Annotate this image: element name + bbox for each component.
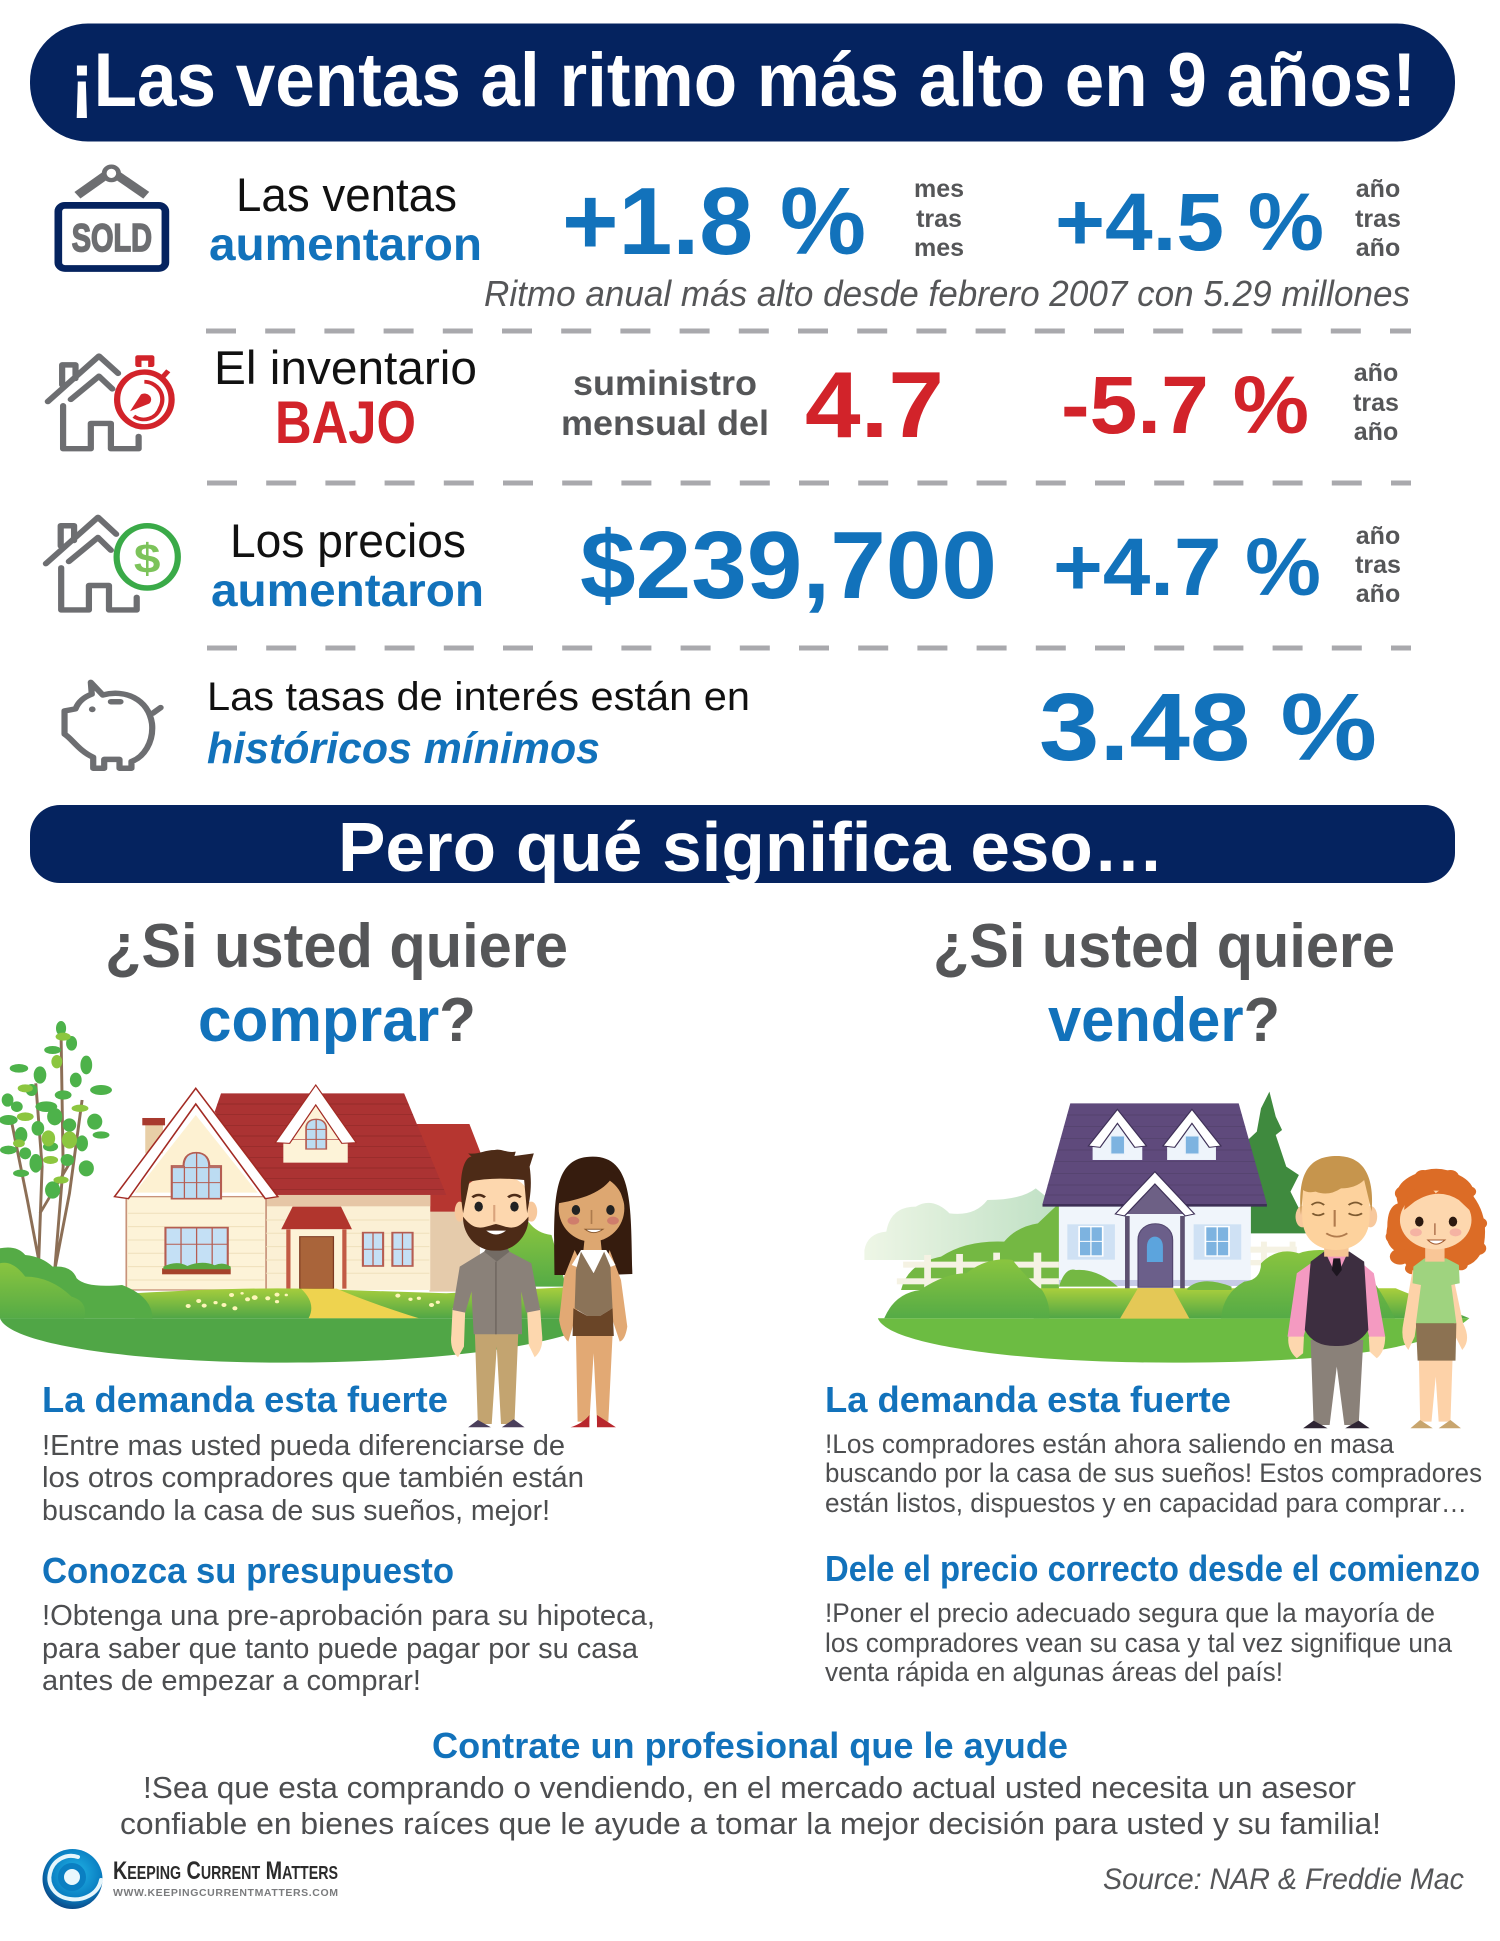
heading: strong demand: La demanda esta fuerte bbox=[825, 1379, 1231, 1420]
illustration: purple roof house and couple bbox=[864, 1092, 1487, 1428]
icon: house with dollar: $ bbox=[134, 535, 161, 582]
ground bbox=[0, 1318, 566, 1363]
heading: buyers: comprar? bbox=[198, 986, 476, 1055]
stat: months of supply: 4.7 bbox=[805, 352, 944, 457]
text: las ventas: Las ventas bbox=[236, 168, 457, 221]
text: advisor: !Sea que esta comprando o vendiendo, en el mercado actual usted necesita un asesor bbox=[143, 1770, 1356, 1805]
text: buyer demand: buscando la casa de sus sueños, mejor! bbox=[42, 1495, 550, 1527]
label: year over year: año bbox=[1356, 522, 1400, 550]
panel: prices row bbox=[46, 512, 1401, 619]
icon: house with stopwatch bbox=[48, 355, 172, 449]
title banner bbox=[30, 24, 1455, 142]
text: monthly supply: mensual del bbox=[561, 404, 769, 443]
stat: yearly inventory change: -5.7 % bbox=[1061, 360, 1309, 451]
ground bbox=[878, 1318, 1469, 1363]
text: historic lows: históricos mínimos bbox=[207, 724, 600, 773]
label: year over year: año bbox=[1354, 418, 1398, 446]
heading: buyers bbox=[105, 912, 568, 1055]
stat: interest rate: 3.48 % bbox=[1039, 674, 1377, 781]
text: buyer demand: los otros compradores que también están bbox=[42, 1462, 584, 1494]
logo: keeping current matters: Keeping Current Matters bbox=[113, 1857, 338, 1885]
heading: buyers: ¿Si usted quiere bbox=[105, 912, 568, 981]
text: price: venta rápida en algunas áreas del país! bbox=[825, 1657, 1283, 1687]
stat: monthly sales change: +1.8 % bbox=[562, 168, 866, 275]
text: budget: !Obtenga una pre-aprobación para su hipoteca, bbox=[42, 1600, 655, 1632]
text: buyer demand: !Entre mas usted pueda diferenciarse de bbox=[42, 1430, 565, 1462]
text: los precios: Los precios bbox=[230, 514, 466, 567]
icon: sold sign bbox=[58, 167, 165, 269]
bushes bbox=[884, 1250, 1395, 1318]
source note: Source: NAR & Freddie Mac bbox=[1103, 1863, 1464, 1896]
icon: piggy bank bbox=[65, 682, 161, 768]
panel: hire a professional bbox=[120, 1725, 1381, 1841]
text: price: los compradores vean su casa y tal vez signifique una bbox=[825, 1628, 1453, 1658]
man with beard bbox=[451, 1150, 542, 1427]
text: seller demand: buscando por la casa de sus sueños! Estos compradores bbox=[825, 1458, 1482, 1488]
icon: house with dollar bbox=[46, 517, 178, 610]
logo: keeping current matters: WWW.KEEPINGCURRENTMATTERS.COM bbox=[113, 1887, 338, 1899]
text: aumentaron: aumentaron bbox=[209, 218, 482, 270]
text: price: !Poner el precio adecuado segura que la mayoría de bbox=[825, 1598, 1435, 1628]
text: seller demand: !Los compradores están ahora saliendo en masa bbox=[825, 1429, 1395, 1459]
text: bajo: BAJO bbox=[275, 389, 416, 456]
panel: seller advice bbox=[825, 1379, 1482, 1687]
text: rates are at: Las tasas de interés están en bbox=[207, 675, 750, 719]
house bbox=[115, 1085, 481, 1292]
label: month over month: mes bbox=[914, 175, 964, 203]
logo: keeping current matters bbox=[42, 1849, 338, 1909]
flowers bbox=[186, 1292, 440, 1310]
heading: sellers: ¿Si usted quiere bbox=[933, 912, 1395, 981]
stat: yearly price change: +4.7 % bbox=[1053, 522, 1321, 613]
man with vest bbox=[1288, 1156, 1385, 1428]
label: year over year: año bbox=[1354, 359, 1398, 387]
panel: sales row bbox=[58, 167, 1410, 314]
heading: hire: Contrate un profesional que le ayude bbox=[432, 1725, 1068, 1766]
text: aumentaron: aumentaron bbox=[211, 564, 484, 616]
text: seller demand: están listos, dispuestos y en capacidad para comprar… bbox=[825, 1488, 1467, 1518]
title banner: ¡Las ventas al ritmo más alto en 9 años! bbox=[70, 38, 1416, 123]
lawn bbox=[135, 1287, 566, 1318]
text: el inventario: El inventario bbox=[214, 341, 477, 394]
label: year over year: año bbox=[1356, 580, 1400, 608]
heading: know your budget: Conozca su presupuesto bbox=[42, 1550, 454, 1591]
label: year over year: tras bbox=[1355, 551, 1401, 579]
house bbox=[1038, 1103, 1269, 1291]
icon: sold sign: SOLD bbox=[72, 216, 152, 260]
bush bbox=[0, 1247, 152, 1318]
pine tree bbox=[1244, 1092, 1312, 1233]
text: monthly supply: suministro bbox=[573, 364, 757, 403]
stat: median price: $239,700 bbox=[580, 512, 997, 619]
clouds bbox=[864, 1188, 1059, 1260]
text: budget: antes de empezar a comprar! bbox=[42, 1665, 421, 1697]
text: advisor: confiable en bienes raíces que le ayude a tomar la mejor decisión para usted y su familia! bbox=[120, 1806, 1381, 1841]
background bushes bbox=[901, 1203, 1059, 1290]
label: year over year: tras bbox=[1355, 205, 1401, 233]
section banner: Pero qué significa eso… bbox=[338, 808, 1164, 886]
woman with red hair bbox=[1386, 1169, 1487, 1428]
panel: inventory row bbox=[48, 341, 1399, 457]
fence bbox=[897, 1242, 1297, 1293]
heading: sellers: vender? bbox=[1048, 986, 1280, 1055]
panel: buyer advice bbox=[42, 1379, 655, 1697]
heading: strong demand: La demanda esta fuerte bbox=[42, 1379, 448, 1420]
section banner bbox=[30, 805, 1455, 886]
lawn bbox=[1034, 1288, 1469, 1318]
label: month over month: mes bbox=[914, 234, 964, 262]
label: month over month: tras bbox=[916, 205, 962, 233]
illustration: red roof house and couple bbox=[0, 1021, 632, 1427]
label: year over year: año bbox=[1356, 234, 1400, 262]
label: year over year: tras bbox=[1353, 389, 1399, 417]
label: year over year: año bbox=[1356, 175, 1400, 203]
panel: rates row bbox=[65, 674, 1377, 781]
woman with vest bbox=[554, 1157, 632, 1427]
note: annual pace: Ritmo anual más alto desde febrero 2007 con 5.29 millones bbox=[484, 273, 1410, 314]
text: budget: para saber que tanto puede pagar por su casa bbox=[42, 1633, 639, 1665]
stat: yearly sales change: +4.5 % bbox=[1055, 177, 1324, 268]
heading: sellers bbox=[933, 912, 1395, 1055]
tree bbox=[0, 1021, 112, 1270]
